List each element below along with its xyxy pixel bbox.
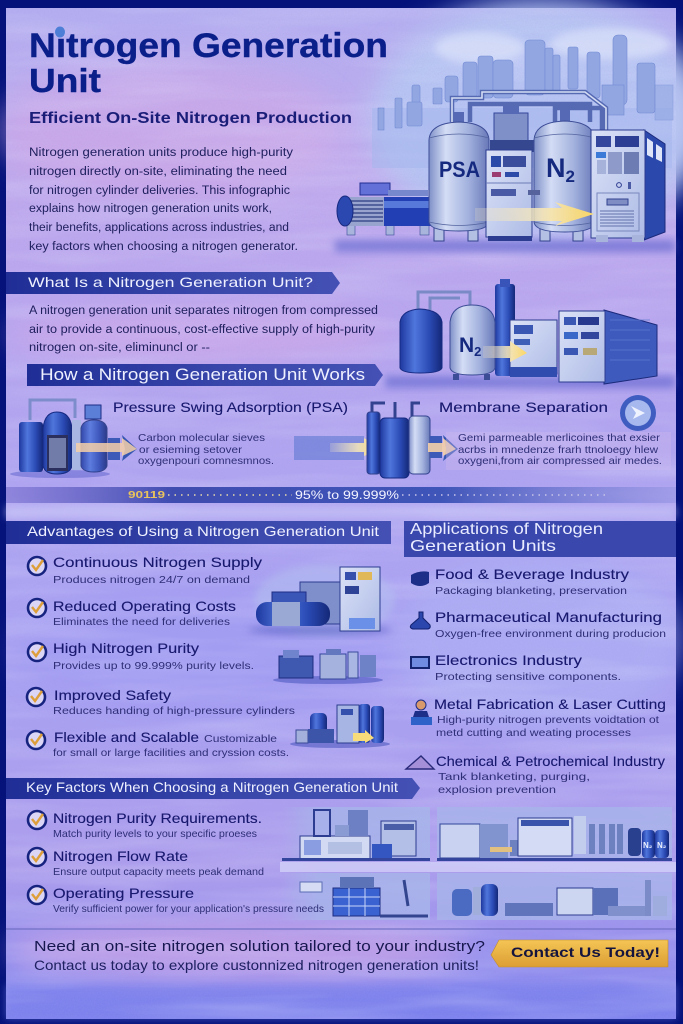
banner: what is xyxy=(6,272,340,294)
item: reduced costs: Eliminates the need for deliveries xyxy=(53,616,230,628)
item: safety: Improved Safety xyxy=(54,687,171,703)
text: Gemi parmeable merlicoines that exsier xyxy=(458,432,661,444)
PSA tank xyxy=(434,228,444,241)
arrow: input xyxy=(294,436,381,460)
icon: flask xyxy=(410,612,430,629)
text: oxygeni,from air compressed air medes. xyxy=(458,455,662,467)
title xyxy=(29,26,388,99)
heading xyxy=(404,521,676,557)
item: reduced costs xyxy=(28,598,236,628)
hero skyline illustration xyxy=(372,28,673,168)
item: flow: Nitrogen Flow Rate xyxy=(53,848,188,864)
text: oxygenpouri comnesmnos. xyxy=(138,455,274,467)
illustration tile: plant line: N₂ xyxy=(657,841,667,850)
item: chemical: Chemical & Petrochemical Industry xyxy=(436,753,665,769)
N2 tank xyxy=(540,228,550,241)
item: high purity xyxy=(28,640,254,672)
intro paragraph: explains how nitrogen generation units work, xyxy=(29,203,272,215)
intro paragraph: key factors when choosing a nitrogen generator. xyxy=(29,241,298,253)
item: electronics: Electronics Industry xyxy=(435,652,582,668)
item: electronics xyxy=(411,652,621,683)
button: contact us: Contact Us Today! xyxy=(511,944,660,960)
intro paragraph: their benefits, applications across industries, and xyxy=(29,222,289,234)
compressor xyxy=(360,183,390,195)
illustration: nitrogen plant xyxy=(385,279,675,388)
item: food: Food & Beverage Industry xyxy=(435,566,629,582)
item: continuous supply xyxy=(28,554,262,586)
item: purity: Nitrogen Purity Requirements. xyxy=(53,810,262,826)
panel: membrane xyxy=(294,395,671,478)
heading: Generation Units xyxy=(410,538,556,555)
illustration: PSA tanks xyxy=(10,400,110,478)
illustration: nitrogen plant: 2 xyxy=(474,344,481,359)
pipes xyxy=(452,92,606,150)
item: continuous supply: Produces nitrogen 24/7 on demand xyxy=(53,574,250,586)
intro paragraph: for nitrogen cylinder deliveries. This infographic xyxy=(29,185,290,197)
item: metal: Metal Fabrication & Laser Cutting xyxy=(434,696,666,712)
item: pharma xyxy=(410,609,666,640)
item: food xyxy=(411,566,629,597)
icon: tent tank xyxy=(406,756,434,769)
illustration: equipment row xyxy=(273,649,383,684)
panel: key factors xyxy=(6,778,672,920)
call to action text xyxy=(34,938,485,973)
centre cabinet xyxy=(486,150,532,237)
illustration: compressor and cabinet xyxy=(248,564,395,636)
illustration: nitrogen plant: N xyxy=(459,334,474,357)
intro paragraph xyxy=(29,147,298,253)
item: metal: High-purity nitrogen prevents voidtation ot xyxy=(437,714,659,726)
illustration: membrane modules xyxy=(367,402,430,478)
item: reduced costs: Reduced Operating Costs xyxy=(53,598,236,614)
panel: PSA xyxy=(10,399,348,478)
heading xyxy=(6,778,420,799)
item: metal: metd cutting and weating processes xyxy=(436,727,631,739)
item: chemical: Tank blanketing, purging, xyxy=(438,771,590,783)
panel: applications xyxy=(404,521,676,796)
item: flexible: Flexible and Scalable xyxy=(54,729,199,745)
heading: Key Factors When Choosing a Nitrogen Generation Unit xyxy=(26,779,398,795)
subtitle: Efficient On-Site Nitrogen Production xyxy=(29,110,352,127)
heading: Applications of Nitrogen xyxy=(410,521,603,538)
banner: how it works: How a Nitrogen Generation Unit Works xyxy=(40,365,365,384)
item: metal xyxy=(411,696,666,739)
item: high purity: High Nitrogen Purity xyxy=(53,640,199,656)
item: food: Packaging blanketing, preservation xyxy=(435,585,627,597)
what is paragraph xyxy=(29,305,378,354)
title: Unit xyxy=(29,62,101,99)
icon: laptop xyxy=(411,657,429,668)
heading xyxy=(6,521,391,544)
arrow: N2 flow xyxy=(475,202,594,226)
text: Carbon molecular sieves xyxy=(138,432,265,444)
item: flow: Ensure output capacity meets peak demand xyxy=(53,866,264,878)
banner: what is: What Is a Nitrogen Generation Unit? xyxy=(28,274,313,290)
call to action text: Need an on-site nitrogen solution tailored to your industry? xyxy=(34,938,485,955)
title: Nitrogen Generation xyxy=(29,27,388,65)
item: pressure xyxy=(28,885,324,915)
item: flexible: for small or large facilities and cryssion costs. xyxy=(53,747,289,759)
text xyxy=(138,432,274,467)
heading: Advantages of Using a Nitrogen Generation Unit xyxy=(27,523,379,539)
icon: gauge xyxy=(620,395,656,431)
icon: worker xyxy=(411,700,432,725)
item: pharma: Pharmaceutical Manufacturing xyxy=(435,609,662,625)
arrow: output xyxy=(428,435,458,461)
what is paragraph: nitrogen on-site, eliminuncl or -- xyxy=(29,342,210,354)
item: safety: Reduces handing of high-pressure cylinders xyxy=(53,705,295,717)
item: pressure: Verify sufficient power for your application's pressure needs xyxy=(53,903,324,915)
purity bar: 90119 xyxy=(128,490,166,501)
icon: food tray xyxy=(411,571,429,586)
item: chemical: explosion prevention xyxy=(438,784,556,796)
hero illustration: PSA and N2 plant xyxy=(335,92,675,252)
hero illustration: PSA and N2 plant: 2 xyxy=(566,167,575,186)
intro paragraph: Nitrogen generation units produce high-purity xyxy=(29,147,293,159)
heading: Pressure Swing Adsorption (PSA) xyxy=(113,399,348,415)
intro paragraph: nitrogen directly on-site, eliminating the need xyxy=(29,166,287,178)
what is paragraph: A nitrogen generation unit separates nitrogen from compressed xyxy=(29,305,378,317)
text: or esieming setover xyxy=(139,444,243,456)
item: flow xyxy=(28,848,264,878)
item: high purity: Provides up to 99.999% purity levels. xyxy=(53,660,254,672)
item: electronics: Protecting sensitive components. xyxy=(435,671,621,683)
item: chemical xyxy=(406,753,665,796)
item: purity: Match purity levels to your specific proeses xyxy=(53,828,257,840)
button: contact us xyxy=(491,940,668,967)
illustration tile: lab unit xyxy=(282,807,430,861)
purity bar: 95% to 99.999% xyxy=(295,490,399,502)
item: continuous supply: Continuous Nitrogen Supply xyxy=(53,554,262,570)
illustration: cylinders xyxy=(290,704,390,748)
item: pharma: Oxygen-free environment during producion xyxy=(435,628,666,640)
illustration tile: plant line xyxy=(437,807,672,861)
item: flexible: Customizable xyxy=(204,733,277,745)
item: safety xyxy=(27,687,295,717)
text xyxy=(446,432,671,470)
item: purity xyxy=(28,810,262,840)
illustration tile: cylinders and machines xyxy=(437,873,672,920)
tank labels: PSA xyxy=(439,157,480,182)
purity bar xyxy=(6,487,676,503)
item: flexible xyxy=(27,729,289,759)
what is paragraph: air to provide a continuous, cost-effective supply of high-purity xyxy=(29,324,375,336)
illustration tile: plant line: N₂ xyxy=(643,841,653,850)
illustration tile: solar panel unit xyxy=(280,873,430,920)
right cabinet xyxy=(644,130,665,240)
call to action text: Contact us today to explore custonnized nitrogen generation units! xyxy=(34,957,479,973)
arrow xyxy=(76,435,137,461)
hero illustration: PSA and N2 plant: N xyxy=(546,153,566,183)
text: acrbs in mnedenze frarh ttnoloegy hlew xyxy=(458,444,658,456)
item: pressure: Operating Pressure xyxy=(53,885,194,901)
heading: Membrane Separation xyxy=(439,399,608,415)
panel: advantages xyxy=(6,521,395,759)
